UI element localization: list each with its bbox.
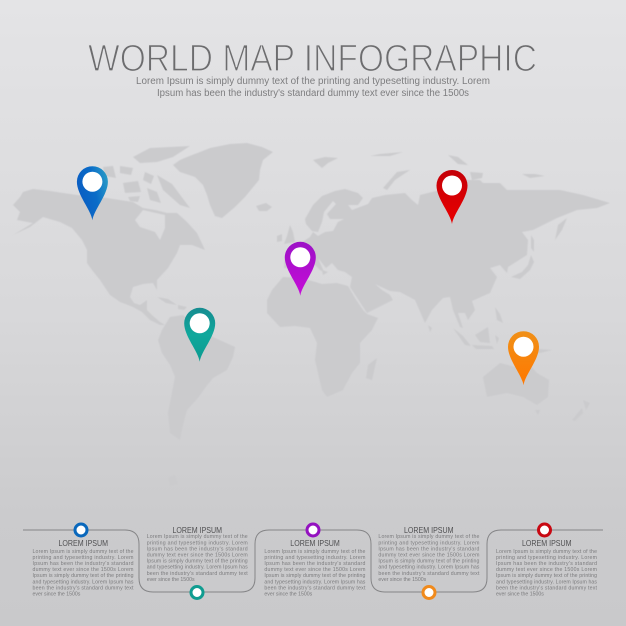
text 3: Ipsum is simply dummy text of the printing <box>264 573 366 579</box>
text 2: Lorem Ipsum is simply dummy text of the <box>147 534 248 540</box>
timeline connector <box>23 530 603 592</box>
text 3: been the industry's standard dummy text <box>264 585 366 591</box>
world map <box>13 143 610 486</box>
africa <box>267 277 378 397</box>
pin: purple <box>285 242 316 296</box>
text 5: been the industry's standard dummy text <box>496 585 598 591</box>
text 3: Lorem Ipsum is simply dummy text of the <box>264 549 366 555</box>
marker: blue <box>75 524 87 536</box>
text 3 <box>264 549 366 598</box>
southeast asia islands <box>428 307 552 353</box>
step 5 <box>496 524 598 598</box>
text 5: Lorem Ipsum is simply dummy text of the <box>496 549 597 555</box>
title: WORLD MAP INFOGRAPHIC <box>88 38 537 80</box>
heading 2: LOREM IPSUM <box>172 526 222 535</box>
text 3: printing and typesetting industry. Lorem <box>264 555 365 561</box>
text 4: ever since the 1500s <box>378 577 427 583</box>
marker: teal <box>191 586 203 598</box>
kamchatka, sakhalin, japan <box>511 218 567 279</box>
text 2: and typesetting industry. Lorem Ipsum has <box>147 565 248 571</box>
greenland <box>173 143 273 218</box>
canadian arctic islands <box>103 146 190 208</box>
subtitle: Lorem Ipsum is simply dummy text of the printing and typesetting industry. Lorem <box>136 76 490 87</box>
text 5: printing and typesetting industry. Lorem <box>496 555 597 561</box>
text 1: Ipsum is simply dummy text of the printing <box>32 573 134 579</box>
subtitle: Ipsum has been the industry's standard dummy text ever since the 1500s <box>157 88 469 99</box>
text 4: Ipsum has been the industry's standard <box>378 546 480 552</box>
text 1 <box>32 549 134 598</box>
madagascar <box>366 358 377 380</box>
british isles <box>277 225 295 244</box>
text 3: and typesetting industry. Lorem Ipsum has <box>264 579 366 585</box>
marker: purple <box>307 524 319 536</box>
text 2: Ipsum is simply dummy text of the printing <box>147 559 248 565</box>
pin: orange <box>508 331 539 385</box>
text 4: Lorem Ipsum is simply dummy text of the <box>378 534 480 540</box>
text 1: Ipsum has been the industry's standard <box>32 561 134 567</box>
text 4: Ipsum is simply dummy text of the printing <box>378 559 480 565</box>
text 2: ever since the 1500s <box>147 577 195 583</box>
text 1: Lorem Ipsum is simply dummy text of the <box>32 549 134 555</box>
text 2: Ipsum has been the industry's standard <box>147 546 248 552</box>
marker: orange <box>423 586 435 598</box>
text 5: Ipsum is simply dummy text of the printing <box>496 573 597 579</box>
arctic islands eurasia <box>313 152 545 275</box>
heading 1: LOREM IPSUM <box>58 539 108 548</box>
text 2: been the industry's standard dummy text <box>147 571 248 577</box>
eurasia <box>284 180 610 328</box>
text 1: ever since the 1500s <box>32 592 81 598</box>
marker: red <box>538 524 550 536</box>
text 5: and typesetting industry. Lorem Ipsum has <box>496 579 597 585</box>
caribbean islands <box>157 297 187 310</box>
step 1 <box>32 524 134 598</box>
text 2 <box>147 534 248 583</box>
text 3: ever since the 1500s <box>264 592 313 598</box>
text 5: ever since the 1500s <box>496 592 544 598</box>
text 4: and typesetting industry. Lorem Ipsum has <box>378 565 480 571</box>
heading 4: LOREM IPSUM <box>404 526 454 535</box>
text 5: Ipsum has been the industry's standard <box>496 561 597 567</box>
new zealand <box>572 400 590 421</box>
text 2: printing and typesetting industry. Lorem <box>147 540 248 546</box>
text 1: and typesetting industry. Lorem Ipsum has <box>32 579 134 585</box>
text 4: dummy text ever since the 1500s Lorem <box>378 552 479 558</box>
south america <box>158 315 235 440</box>
text 1: been the industry's standard dummy text <box>32 585 134 591</box>
southern islands <box>168 475 178 486</box>
pin: teal <box>184 308 215 362</box>
iceland <box>256 203 272 211</box>
text 4: printing and typesetting industry. Lorem <box>378 540 479 546</box>
text 3: dummy text ever since the 1500s Lorem <box>264 567 365 573</box>
australia <box>483 363 549 415</box>
step 4 <box>378 526 480 598</box>
heading 5: LOREM IPSUM <box>522 539 572 548</box>
text 3: Ipsum has been the industry's standard <box>264 561 366 567</box>
heading 3: LOREM IPSUM <box>290 539 340 548</box>
step 3 <box>264 524 366 598</box>
text 2: dummy text ever since the 1500s Lorem <box>147 552 248 558</box>
text 4 <box>378 534 480 583</box>
text 1: printing and typesetting industry. Lorem <box>32 555 134 561</box>
text 1: dummy text ever since the 1500s Lorem <box>32 567 134 573</box>
pin: blue <box>77 166 108 220</box>
pin: red <box>436 170 468 224</box>
text 4: been the industry's standard dummy text <box>378 571 480 577</box>
text 5 <box>496 549 598 598</box>
subtitle <box>136 76 490 99</box>
text 5: dummy text ever since the 1500s Lorem <box>496 567 597 573</box>
step 2 <box>147 526 248 598</box>
north america <box>13 189 205 325</box>
